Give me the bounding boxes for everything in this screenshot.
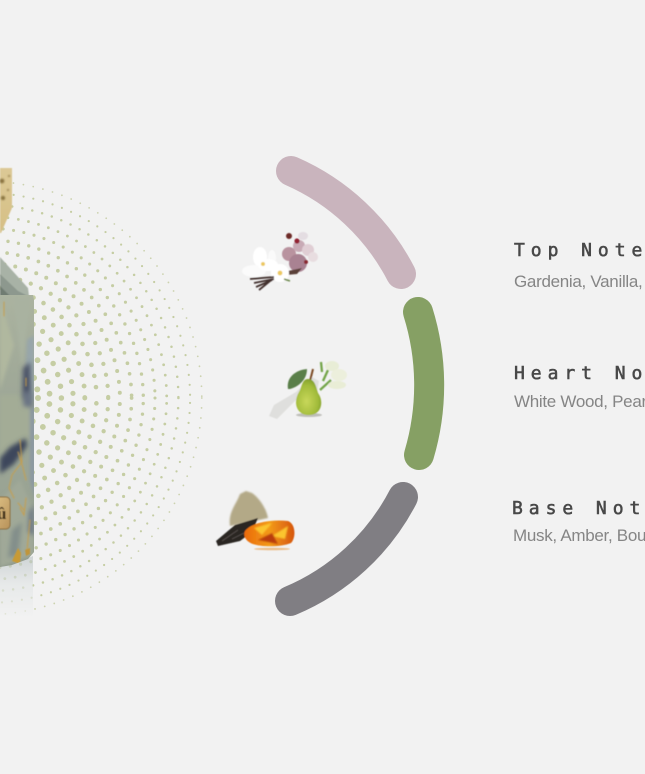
gold veins bbox=[4, 302, 30, 550]
pear bbox=[296, 379, 321, 415]
bottle label bbox=[0, 497, 10, 529]
bottle reflection bbox=[0, 556, 33, 618]
icon: musk, amber and vanilla bbox=[216, 491, 294, 550]
white gardenia bbox=[242, 247, 290, 282]
musk tuft bbox=[230, 491, 268, 526]
vanilla pods bbox=[250, 277, 274, 290]
white wood strip bbox=[269, 377, 319, 419]
marble pattern bbox=[0, 297, 35, 567]
arc: base note bbox=[290, 497, 403, 601]
heading: top notes: Top Note bbox=[514, 240, 645, 261]
bottle body bbox=[0, 295, 34, 567]
pink blossoms bbox=[282, 232, 318, 275]
arc: heart note bbox=[418, 312, 429, 455]
amber shadow bbox=[254, 548, 290, 550]
leaf bbox=[288, 369, 307, 389]
white flowers bbox=[320, 361, 347, 390]
halftone dot circle bbox=[0, 181, 202, 615]
text: heart notes list: White Wood, Pear bbox=[514, 392, 645, 411]
heading: base notes: Base Not bbox=[512, 498, 645, 519]
amber stone bbox=[244, 520, 294, 546]
pear shadow bbox=[296, 413, 322, 417]
bottle shoulder bbox=[0, 257, 29, 296]
icon: gardenia, blossom and vanilla bbox=[242, 232, 318, 290]
text: top notes list: Gardenia, Vanilla, bbox=[514, 272, 642, 291]
vanilla sticks bbox=[216, 518, 258, 546]
bottle cap bbox=[0, 168, 12, 233]
arc: top note bbox=[291, 171, 401, 274]
icon: pear and white flowers bbox=[269, 361, 347, 419]
heading: heart notes: Heart No bbox=[514, 363, 645, 384]
text: base notes list: Musk, Amber, Bou bbox=[513, 526, 645, 545]
pear stem bbox=[310, 369, 313, 381]
perfume bottle bbox=[0, 168, 35, 618]
